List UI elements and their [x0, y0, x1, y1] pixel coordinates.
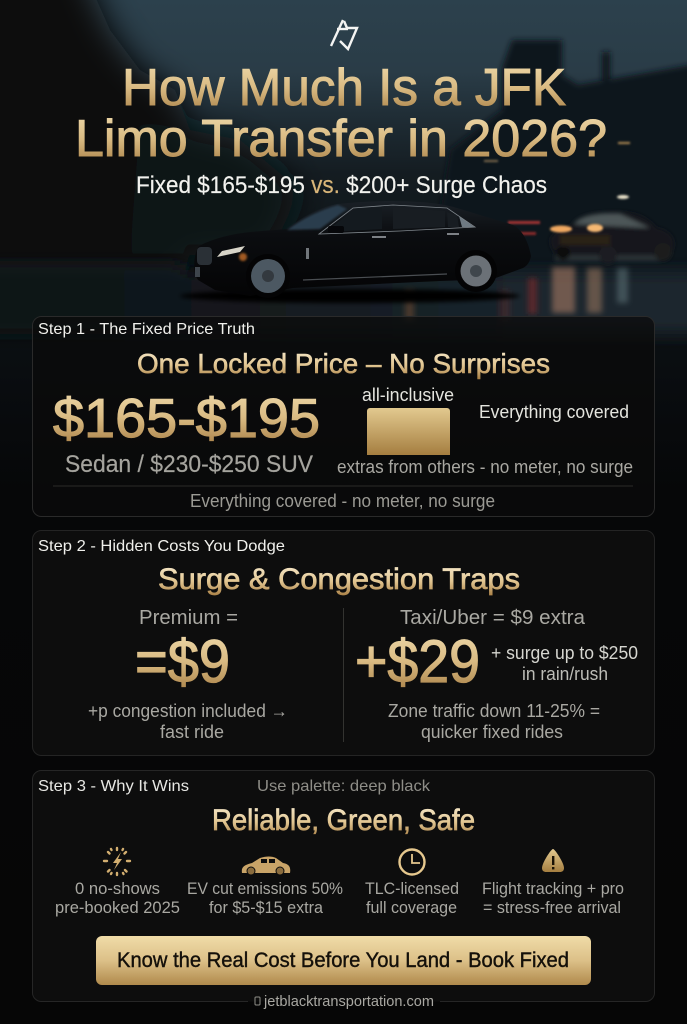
feature: EV emissions: for $5-$15 extra	[209, 898, 324, 917]
step 2 label: Step 2 - Hidden Costs You Dodge	[38, 538, 285, 555]
everything covered note: Everything covered	[479, 402, 629, 422]
icon: car	[242, 856, 290, 875]
vehicle pricing: Sedan / $230-$250 SUV	[65, 451, 313, 478]
premium column: +p congestion included →	[88, 701, 288, 721]
call to action button: Know the Real Cost Before You Land - Book Fixed	[117, 949, 569, 972]
step 1 label: Step 1 - The Fixed Price Truth	[38, 321, 255, 338]
all-inclusive label: all-inclusive	[362, 385, 454, 405]
premium column: =$9	[135, 628, 230, 695]
gold box	[367, 408, 450, 455]
step 3 heading: Reliable, Green, Safe	[212, 804, 475, 837]
feature: no-shows: pre-booked 2025	[55, 898, 180, 917]
call to action button	[96, 936, 591, 985]
icon: warning	[542, 849, 564, 872]
icon: clock	[400, 850, 424, 874]
logo icon	[331, 20, 357, 49]
taxi and uber column: Zone traffic down 11-25% =	[388, 701, 600, 721]
title: How Much Is a JFK	[122, 59, 566, 117]
feature: TLC licensed	[365, 879, 459, 917]
feature: flight tracking	[482, 879, 624, 917]
taxi and uber column: Taxi/Uber = $9 extra	[400, 607, 586, 629]
feature: EV emissions: EV cut emissions 50%	[187, 879, 343, 898]
extras note: extras from others - no meter, no surge	[337, 457, 633, 477]
premium column: fast ride	[160, 722, 224, 742]
step 1 heading: One Locked Price – No Surprises	[137, 348, 550, 379]
feature: flight tracking: Flight tracking + pro	[482, 879, 624, 898]
icon: lightning starburst	[104, 848, 130, 875]
feature: no-shows: 0 no-shows	[75, 879, 160, 898]
taxi and uber column	[355, 607, 638, 742]
feature: EV emissions	[187, 879, 343, 917]
summary line: Everything covered - no meter, no surge	[190, 491, 495, 511]
taxi and uber column: in rain/rush	[522, 664, 608, 684]
feature: TLC licensed: full coverage	[366, 898, 457, 917]
taxi and uber column: quicker fixed rides	[421, 722, 563, 742]
palette note: Use palette: deep black	[257, 778, 431, 795]
feature: no-shows	[55, 879, 180, 917]
title	[75, 59, 607, 168]
taxi and uber column: +$29	[355, 628, 480, 695]
step 2 heading: Surge & Congestion Traps	[158, 563, 520, 596]
big price: $165-$195	[53, 387, 320, 449]
taxi and uber column: + surge up to $250	[491, 643, 638, 663]
premium column: Premium =	[139, 607, 238, 629]
title: Limo Transfer in 2026?	[75, 110, 607, 168]
subtitle: Fixed $165-$195 vs. $200+ Surge Chaos	[136, 172, 547, 199]
step 3 label: Step 3 - Why It Wins	[38, 778, 189, 795]
panel: step 2 hidden costs	[32, 530, 654, 756]
feature: TLC licensed: TLC-licensed	[365, 879, 459, 898]
illustration: second car in background	[550, 195, 674, 264]
premium column	[88, 607, 288, 742]
panel: step 3 why it wins	[32, 770, 655, 1010]
feature: flight tracking: = stress-free arrival	[483, 898, 621, 917]
panel: step 1 fixed price	[32, 316, 654, 516]
website footer: jetblacktransportation.com	[263, 993, 434, 1010]
illustration: black limousine	[180, 201, 531, 303]
